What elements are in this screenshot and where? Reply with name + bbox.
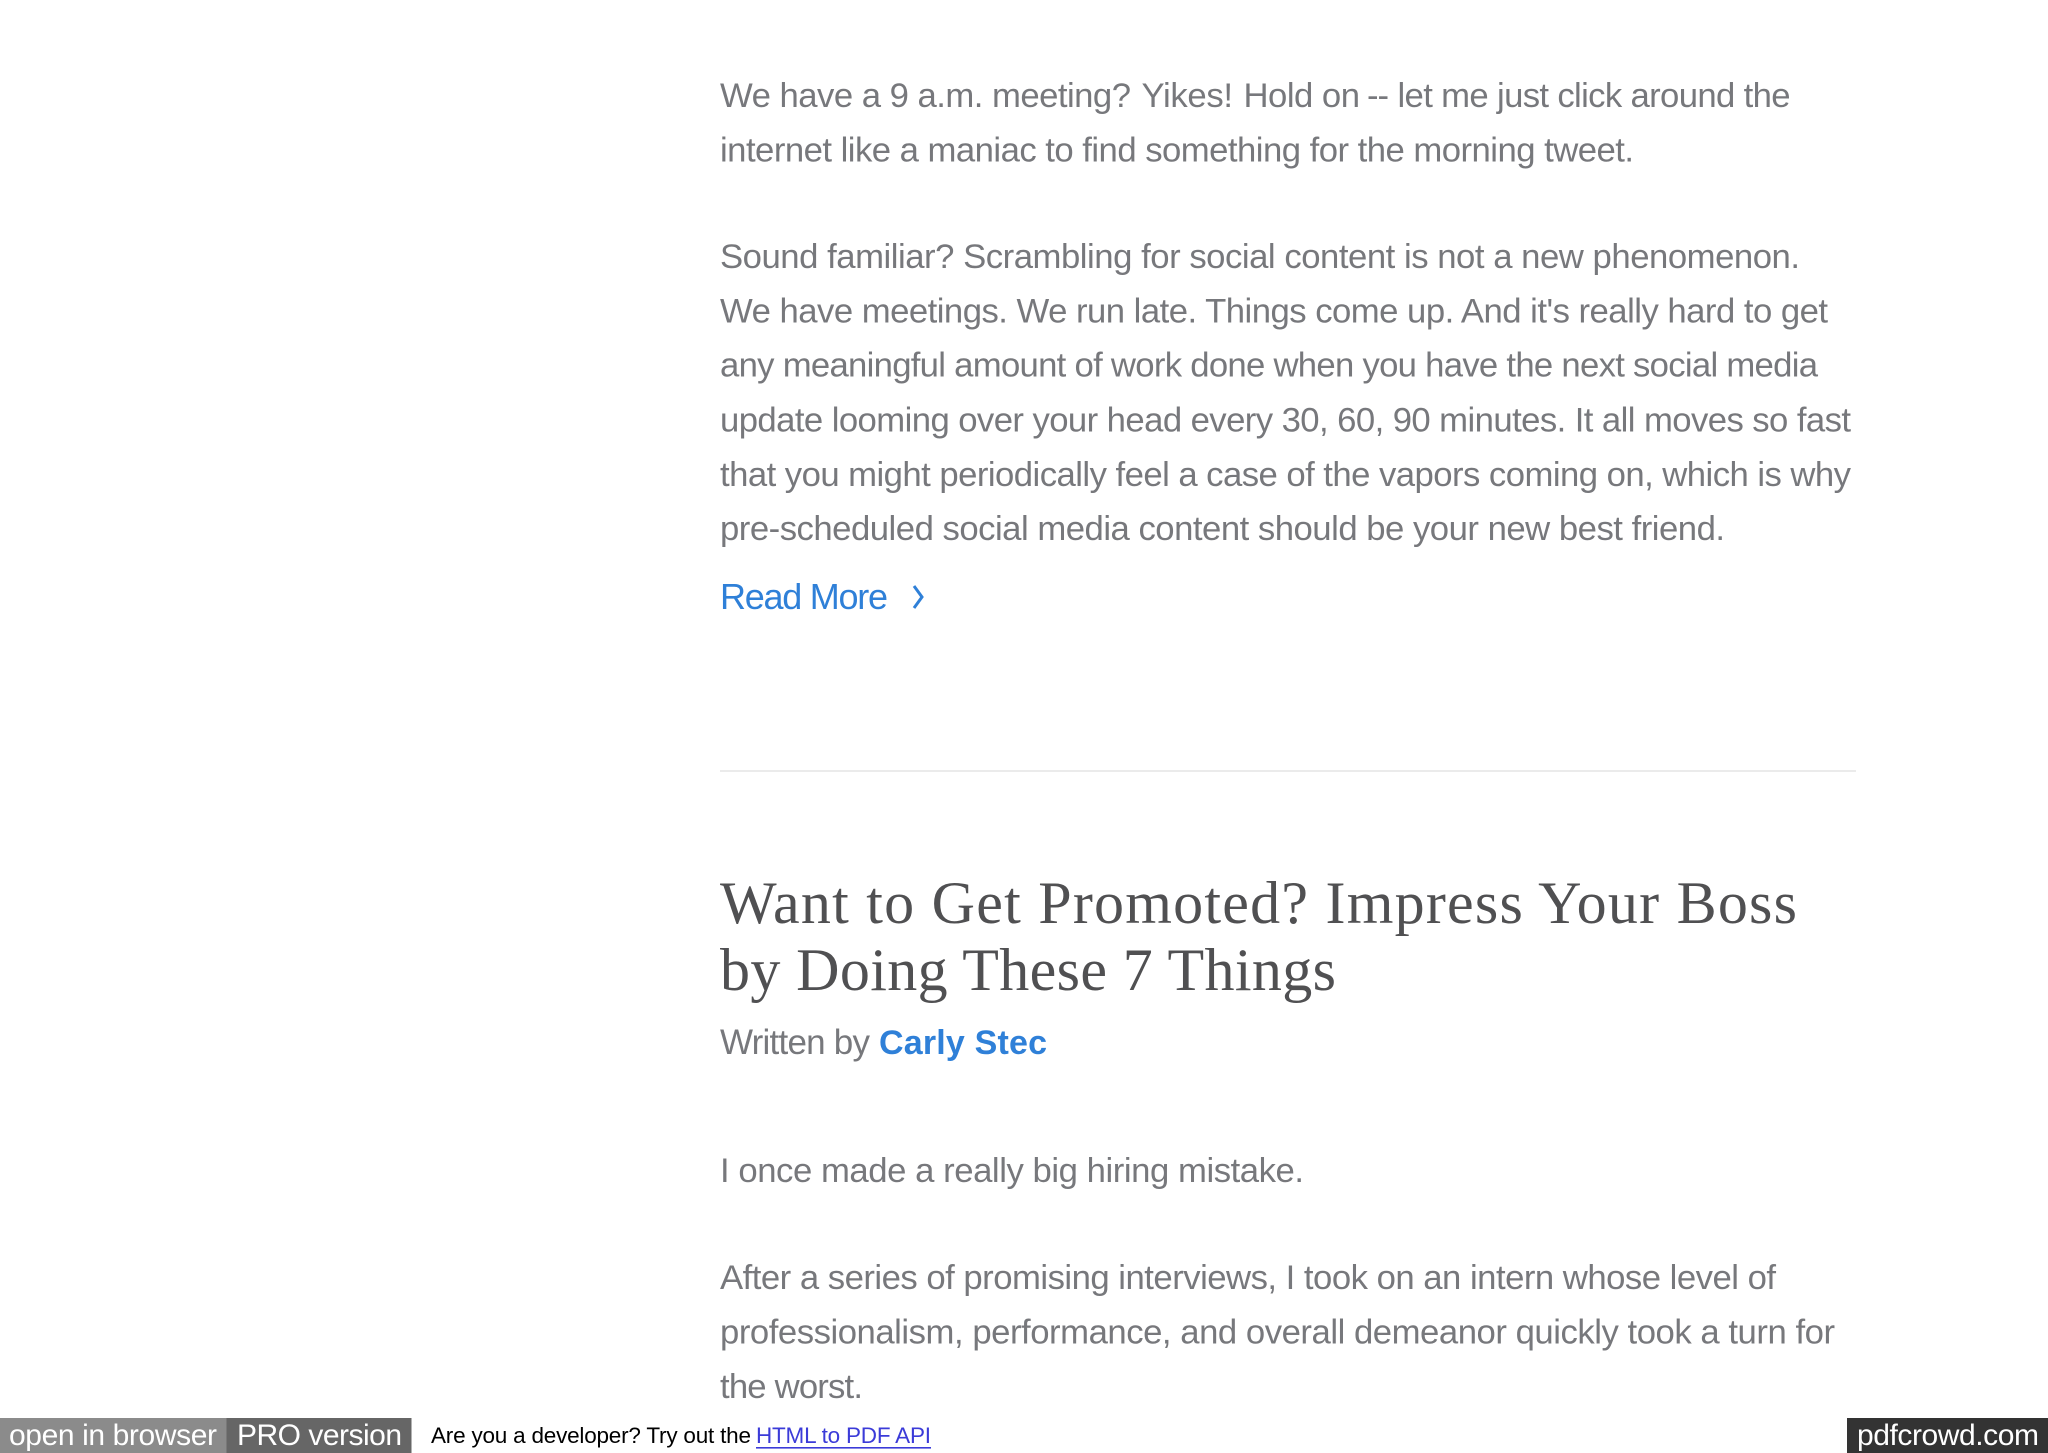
text block: intro paragraph: -- xyxy=(1367,77,1389,115)
byline: Written by xyxy=(720,1023,870,1062)
text block: intro paragraph xyxy=(720,77,1790,170)
footer badge: pdfcrowd.com: pdfcrowd.com xyxy=(1857,1419,2039,1452)
text block: second paragraph: Sound familiar? Scrambling for social content is not a new phenomenon. xyxy=(720,238,1800,276)
text block: article opening: I once made a really big hiring mistake. xyxy=(720,1152,1304,1190)
text block: second paragraph: any meaningful amount of work done when you have the next social media xyxy=(720,346,1819,384)
footer bar: open in browser button: open in browser xyxy=(9,1419,217,1452)
footer link: HTML to PDF API: HTML to PDF API xyxy=(756,1423,931,1448)
text block: second paragraph: that you might periodically feel a case of the vapors coming on, which is why xyxy=(720,456,1852,494)
text block: second paragraph xyxy=(720,238,1852,548)
text block: article second paragraph: After a series of promising interviews, I took on an intern whose level of xyxy=(720,1259,1776,1297)
text block: second paragraph: We have meetings. We run late. Things come up. And it's really hard to get xyxy=(720,292,1828,330)
icon: chevron xyxy=(914,586,922,608)
text block: article second paragraph xyxy=(720,1259,1835,1406)
footer text: developer prompt: Are you a developer? Try out the xyxy=(431,1423,751,1448)
text block: intro paragraph: Hold on xyxy=(1244,77,1360,115)
footer bar: PRO version button: PRO version xyxy=(237,1419,402,1452)
text block: second paragraph: update looming over your head every 30, 60, 90 minutes. It all moves so fast xyxy=(720,402,1851,440)
text block: second paragraph: pre-scheduled social media content should be your new best friend. xyxy=(720,510,1725,548)
text block: intro paragraph: let me just click around the xyxy=(1398,77,1790,115)
heading: article title: Want to Get Promoted? Impress Your Boss xyxy=(720,870,1797,936)
link: read more: Read More xyxy=(720,576,888,617)
byline: Carly Stec xyxy=(879,1024,1047,1062)
byline xyxy=(720,1023,1047,1062)
text block: intro paragraph: Yikes! xyxy=(1142,77,1233,115)
text block: intro paragraph: We have a 9 a.m. meeting? xyxy=(720,77,1131,115)
heading: article title xyxy=(720,870,1797,1003)
text block: article second paragraph: the worst. xyxy=(720,1368,863,1406)
text block: article second paragraph: professionalism, performance, and overall demeanor quickly took a turn for xyxy=(720,1314,1835,1352)
heading: article title: by Doing These 7 Things xyxy=(720,937,1336,1003)
text block: intro paragraph: internet like a maniac to find something for the morning tweet. xyxy=(720,132,1634,170)
